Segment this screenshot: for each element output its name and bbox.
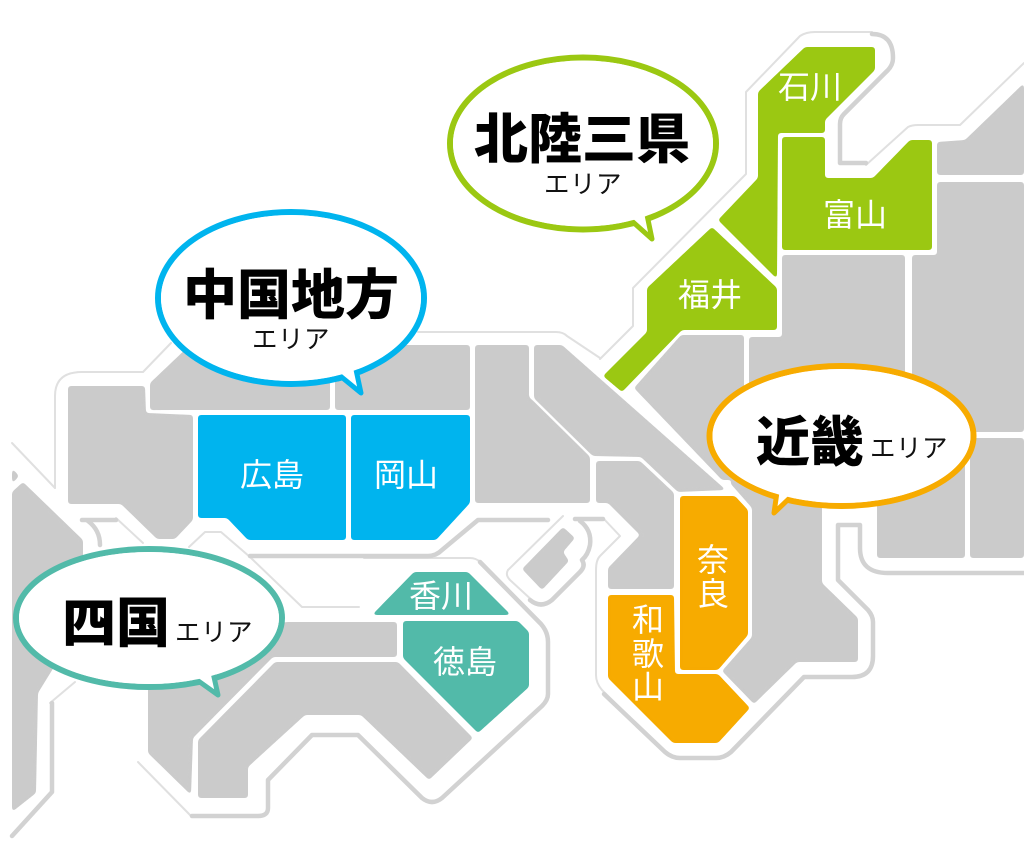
prefecture: 広島 — [198, 415, 346, 540]
label: 富山: 富山 — [823, 197, 887, 233]
callout: 北陸三県エリア: 北陸三県 — [474, 110, 690, 170]
panel: 中国地方 prefectures — [198, 415, 470, 540]
callout: 北陸三県エリア: エリア — [544, 171, 622, 199]
label: 徳島: 徳島 — [433, 644, 497, 680]
prefecture: 岡山 — [351, 415, 470, 540]
prefecture: 徳島 — [403, 621, 529, 733]
prefecture: 香川 — [372, 572, 511, 615]
label: 和歌山: 歌 — [632, 636, 664, 672]
prefecture: 福井 — [603, 227, 777, 392]
callout: 四国エリア: 四国 — [62, 594, 170, 654]
callout: 北陸三県エリア — [450, 58, 716, 239]
label: 和歌山: 和 — [632, 602, 664, 638]
label: 広島: 広島 — [240, 457, 304, 493]
callout: 近畿エリア — [710, 366, 974, 513]
prefecture: 富山 — [782, 137, 932, 250]
prefecture: 和歌山 — [608, 595, 750, 743]
callout: 近畿エリア: 近畿 — [756, 413, 864, 473]
label: 石川: 石川 — [778, 69, 842, 105]
callout: 中国地方エリア: エリア — [252, 326, 330, 354]
label: 和歌山: 山 — [632, 669, 664, 705]
label: 岡山: 岡山 — [374, 457, 438, 493]
prefecture: 石川 — [718, 47, 875, 279]
panel: 近畿 prefectures — [608, 496, 750, 743]
panel: 四国 prefectures — [372, 572, 529, 733]
callout: 中国地方エリア: 中国地方 — [183, 266, 399, 326]
label: 福井: 福井 — [678, 277, 742, 313]
callout: 近畿エリア: エリア — [870, 435, 948, 463]
panel: 北陸三県 prefectures — [603, 47, 932, 392]
label: 奈良: 良 — [697, 576, 729, 612]
prefecture: 奈良 — [680, 496, 748, 670]
label: 奈良: 奈 — [697, 542, 729, 578]
callout: 四国エリア — [16, 549, 282, 695]
callout: 中国地方エリア — [158, 212, 424, 393]
callout: 四国エリア: エリア — [175, 619, 253, 647]
label: 香川: 香川 — [409, 578, 473, 614]
